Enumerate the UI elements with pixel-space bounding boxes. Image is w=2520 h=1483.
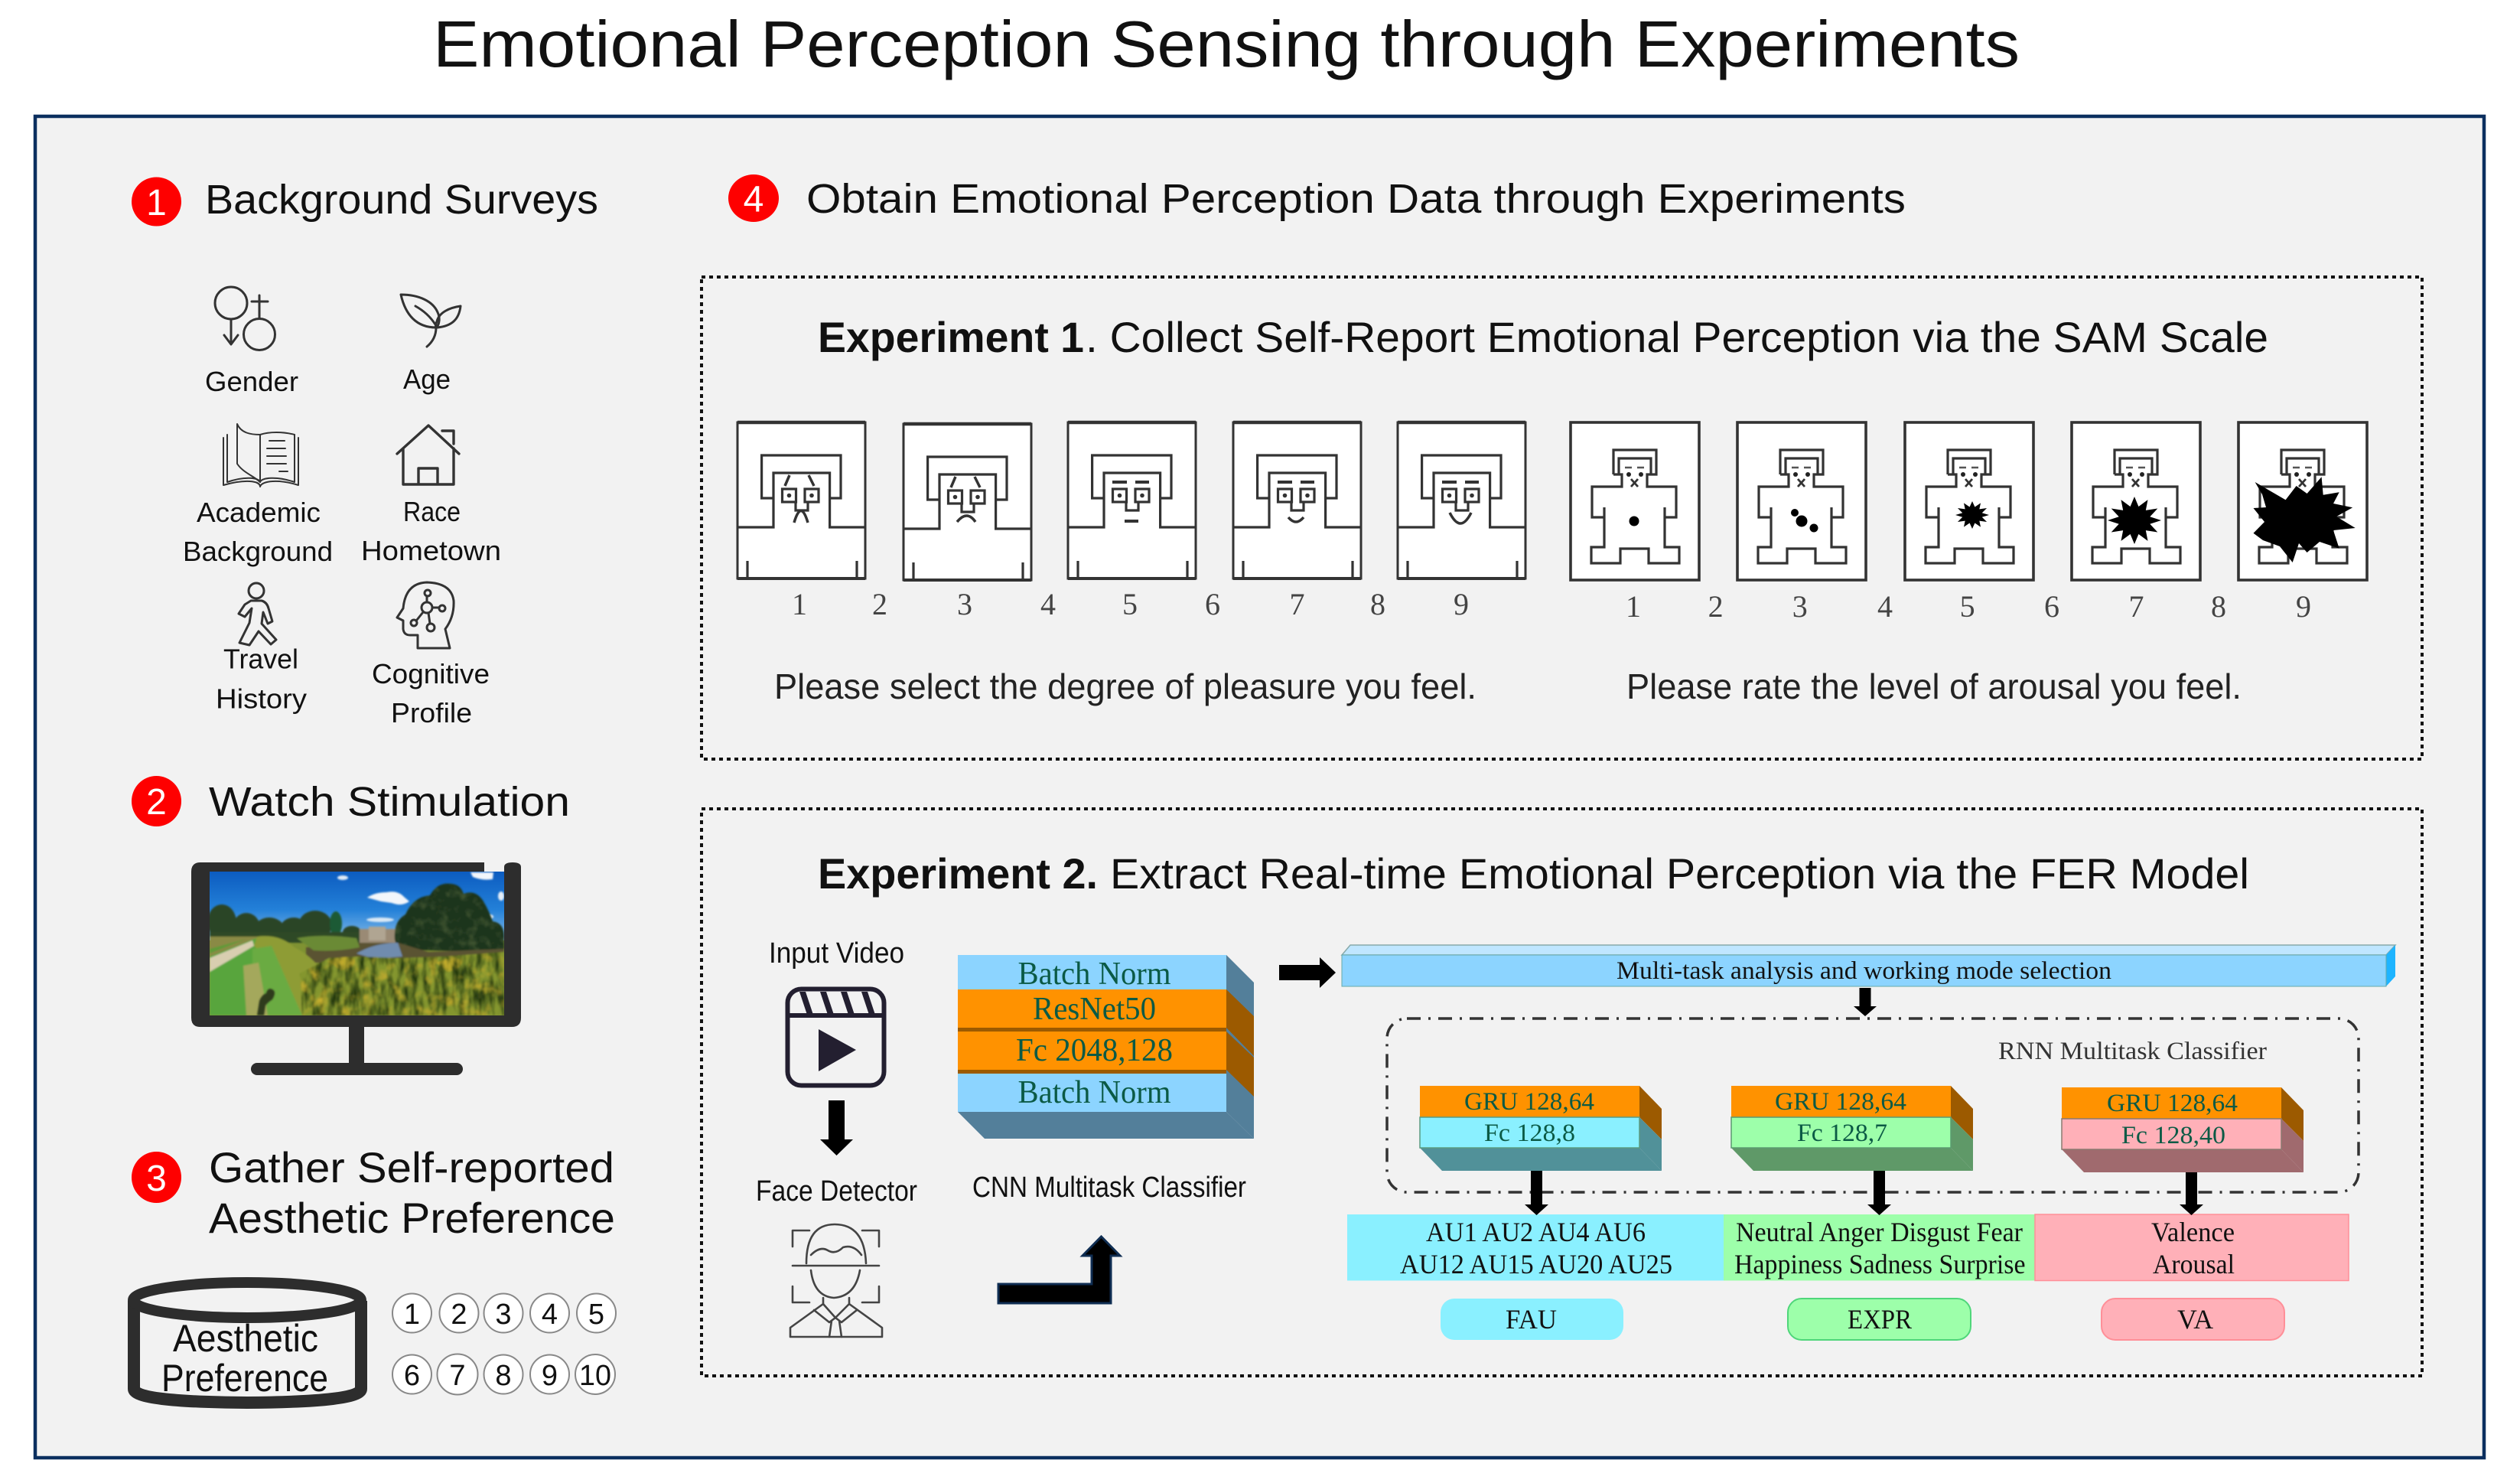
heading: background surveys: Background Surveys bbox=[205, 177, 598, 223]
arrow: VA bbox=[2180, 1172, 2203, 1215]
label: cognitive profile: Profile bbox=[391, 697, 472, 728]
text: arousal prompt: Please rate the level of arousal you feel. bbox=[1626, 667, 2242, 706]
scale numbers: 8 bbox=[1370, 587, 1385, 621]
label: race hometown bbox=[361, 496, 501, 566]
label: gender: Gender bbox=[205, 366, 298, 397]
icon: gender bbox=[215, 287, 275, 350]
heading: experiment 1: Experiment 1 bbox=[818, 313, 1084, 361]
label: academic background: Academic bbox=[197, 497, 321, 528]
panel: experiment 2 bbox=[702, 809, 2422, 1376]
label: academic background bbox=[183, 497, 333, 567]
heading: gather self-reported aesthetic preference bbox=[209, 1143, 615, 1242]
icon: aesthetic preference database cylinder bbox=[133, 1283, 361, 1403]
box: RNN multitask classifier bbox=[1387, 1019, 2359, 1192]
block stack: CNN multitask classifier bbox=[958, 955, 1254, 1139]
panel: experiment 1 bbox=[702, 277, 2422, 759]
chart: SAM arousal scale bbox=[1571, 422, 2367, 624]
scale numbers: 1 bbox=[792, 587, 807, 621]
scale numbers: 4 bbox=[1877, 589, 1893, 624]
icon: aesthetic preference database cylinder: Preference bbox=[161, 1357, 328, 1400]
box: RNN multitask classifier: RNN Multitask Classifier bbox=[1998, 1038, 2267, 1065]
rating scale circles 1 to 10 bbox=[392, 1293, 616, 1394]
label: academic background: Background bbox=[183, 536, 333, 567]
scale numbers: 9 bbox=[2296, 589, 2311, 624]
output box: EXPR labels: Neutral Anger Disgust Fear bbox=[1736, 1217, 2023, 1247]
layer: batch norm: Batch Norm bbox=[1017, 957, 1171, 992]
rating scale circles 1 to 10: 7 bbox=[449, 1360, 466, 1392]
scale numbers: 8 bbox=[2211, 589, 2226, 624]
layer: resnet50 bbox=[958, 989, 1226, 1028]
icon: house bbox=[397, 425, 459, 484]
label: travel history bbox=[216, 643, 307, 715]
icon: video clapper bbox=[788, 989, 884, 1085]
rating scale circles 1 to 10: 4 bbox=[542, 1299, 558, 1331]
pill: VA bbox=[2102, 1299, 2284, 1340]
layer: batch norm: Batch Norm bbox=[1017, 1075, 1171, 1110]
bar: multi-task analysis bbox=[1342, 945, 2395, 986]
icon: aesthetic preference database cylinder: Aesthetic bbox=[173, 1317, 318, 1360]
label: cognitive profile: Cognitive bbox=[372, 658, 490, 689]
rating scale circles 1 to 10: 9 bbox=[542, 1360, 558, 1392]
SAM body 3 bbox=[1737, 422, 1866, 580]
badge 3: 3 bbox=[146, 1159, 167, 1199]
SAM face 5 bbox=[1068, 422, 1196, 579]
SAM face 7 bbox=[1233, 422, 1361, 579]
label: travel history: History bbox=[216, 683, 307, 715]
pill: VA: VA bbox=[2177, 1304, 2213, 1335]
chart: SAM pleasure scale bbox=[737, 422, 1525, 621]
title: Emotional Perception Sensing through Experiments bbox=[433, 8, 2020, 81]
output box: EXPR labels: Happiness Sadness Surprise bbox=[1734, 1249, 2026, 1279]
rating scale circles 1 to 10: 3 bbox=[495, 1299, 512, 1331]
SAM body 1 bbox=[1571, 422, 1699, 580]
SAM face 1 bbox=[737, 422, 865, 579]
arrow: FAU bbox=[1525, 1171, 1548, 1215]
text: pleasure prompt: Please select the degree of pleasure you feel. bbox=[774, 667, 1477, 706]
heading: experiment 2: Experiment 2. bbox=[818, 849, 1098, 898]
badge 1: 1 bbox=[146, 183, 167, 223]
block: FAU classifier: Fc 128,8 bbox=[1484, 1120, 1575, 1147]
output box: FAU labels: AU1 AU2 AU4 AU6 bbox=[1426, 1217, 1646, 1247]
section 3: aesthetic preference bbox=[132, 1143, 616, 1403]
heading: experiment 2: Extract Real-time Emotional Perception via the FER Model bbox=[1110, 849, 2249, 898]
label: cognitive profile bbox=[372, 658, 490, 728]
block: EXPR classifier: GRU 128,64 bbox=[1775, 1088, 1906, 1116]
badge 1 bbox=[132, 178, 181, 227]
heading: watch stimulation: Watch Stimulation bbox=[209, 779, 570, 825]
pill: EXPR: EXPR bbox=[1848, 1304, 1912, 1335]
scale numbers: 7 bbox=[1290, 587, 1305, 621]
arrow: EXPR bbox=[1867, 1171, 1891, 1215]
rating scale circles 1 to 10: 5 bbox=[588, 1299, 604, 1331]
SAM body 5 bbox=[1905, 422, 2033, 580]
layer: fully connected: Fc 2048,128 bbox=[1016, 1033, 1173, 1068]
SAM body 9 bbox=[2238, 422, 2367, 580]
rating scale circles 1 to 10: 1 bbox=[404, 1299, 420, 1331]
scale numbers: 4 bbox=[1040, 587, 1056, 621]
scale numbers: 5 bbox=[1960, 589, 1975, 624]
heading: gather self-reported aesthetic preference: Gather Self-reported bbox=[209, 1143, 614, 1191]
icon: monitor with landscape bbox=[191, 862, 521, 1075]
scale numbers: 9 bbox=[1454, 587, 1469, 621]
label: CNN multitask classifier: CNN Multitask Classifier bbox=[972, 1172, 1246, 1204]
heading: obtain emotional perception data: Obtain Emotional Perception Data through Experiments bbox=[806, 176, 1906, 222]
pill: FAU bbox=[1441, 1299, 1623, 1340]
pill: FAU: FAU bbox=[1506, 1304, 1557, 1335]
section 2: watch stimulation bbox=[132, 776, 570, 1075]
icon: face detection person bbox=[790, 1224, 882, 1337]
scale numbers: 3 bbox=[957, 587, 972, 621]
label: race hometown: Race bbox=[403, 496, 461, 527]
badge 3 bbox=[132, 1152, 181, 1203]
output box: EXPR labels bbox=[1724, 1214, 2035, 1281]
label: input video: Input Video bbox=[769, 937, 904, 970]
icon: cognitive head bbox=[397, 582, 454, 648]
rating scale circles 1 to 10: 10 bbox=[579, 1360, 611, 1392]
output box: FAU labels bbox=[1347, 1214, 1724, 1281]
SAM face 9 bbox=[1398, 422, 1525, 579]
bar: multi-task analysis: Multi-task analysis and working mode selection bbox=[1617, 957, 2111, 985]
scale numbers: 6 bbox=[1205, 587, 1220, 621]
block: EXPR classifier bbox=[1731, 1086, 1973, 1171]
output box: VA labels: Valence bbox=[2151, 1217, 2235, 1247]
rating scale circles 1 to 10: 8 bbox=[495, 1360, 512, 1392]
badge 2: 2 bbox=[146, 782, 167, 823]
pill: EXPR bbox=[1788, 1299, 1971, 1340]
block: VA classifier: Fc 128,40 bbox=[2121, 1122, 2225, 1149]
output box: VA labels: Arousal bbox=[2153, 1249, 2235, 1279]
scale numbers: 1 bbox=[1626, 589, 1641, 624]
heading: experiment 1: . Collect Self-Report Emotional Perception via the SAM Scale bbox=[1086, 313, 2268, 361]
layer: batch norm bbox=[958, 955, 1226, 992]
scale numbers bbox=[1626, 589, 2311, 624]
scale numbers: 2 bbox=[1708, 589, 1724, 624]
badge 2 bbox=[132, 776, 181, 826]
block: VA classifier bbox=[2062, 1087, 2303, 1172]
block: EXPR classifier: Fc 128,7 bbox=[1797, 1120, 1887, 1147]
arrow: video to face detector bbox=[820, 1100, 853, 1155]
icon: age leaf bbox=[401, 295, 461, 347]
rating scale circles 1 to 10: 6 bbox=[404, 1360, 420, 1392]
badge 4: 4 bbox=[744, 179, 763, 220]
scale numbers: 2 bbox=[872, 587, 887, 621]
layer: batch norm bbox=[958, 1074, 1226, 1112]
icon: book bbox=[223, 424, 298, 487]
scale numbers: 3 bbox=[1792, 589, 1808, 624]
SAM face 3 bbox=[903, 424, 1031, 580]
badge 4 bbox=[728, 174, 779, 222]
block: VA classifier: GRU 128,64 bbox=[2107, 1090, 2238, 1117]
label: age: Age bbox=[403, 363, 451, 395]
arrow: bent arrow up bbox=[998, 1237, 1120, 1303]
scale numbers: 7 bbox=[2128, 589, 2144, 624]
layer: fully connected bbox=[958, 1032, 1226, 1070]
arrow: bar to RNN classifier bbox=[1854, 988, 1877, 1016]
output box: VA labels bbox=[2035, 1214, 2349, 1281]
SAM body 7 bbox=[2072, 422, 2200, 580]
rating scale circles 1 to 10: 2 bbox=[451, 1299, 467, 1331]
label: face detector: Face Detector bbox=[756, 1175, 917, 1208]
block: FAU classifier: GRU 128,64 bbox=[1464, 1088, 1594, 1116]
output box: FAU labels: AU12 AU15 AU20 AU25 bbox=[1400, 1249, 1672, 1279]
scale numbers: 5 bbox=[1122, 587, 1138, 621]
arrow: to multi-task bar bbox=[1279, 957, 1336, 988]
layer: resnet50: ResNet50 bbox=[1033, 992, 1156, 1027]
block: FAU classifier bbox=[1420, 1086, 1662, 1171]
heading: gather self-reported aesthetic preference: Aesthetic Preference bbox=[209, 1194, 615, 1242]
scale numbers bbox=[792, 587, 1469, 621]
label: travel history: Travel bbox=[223, 643, 298, 675]
label: race hometown: Hometown bbox=[361, 535, 501, 566]
scale numbers: 6 bbox=[2044, 589, 2059, 624]
icon: walking person bbox=[239, 583, 276, 645]
section 1: background surveys bbox=[132, 177, 598, 728]
section 4: heading bbox=[728, 174, 1906, 222]
